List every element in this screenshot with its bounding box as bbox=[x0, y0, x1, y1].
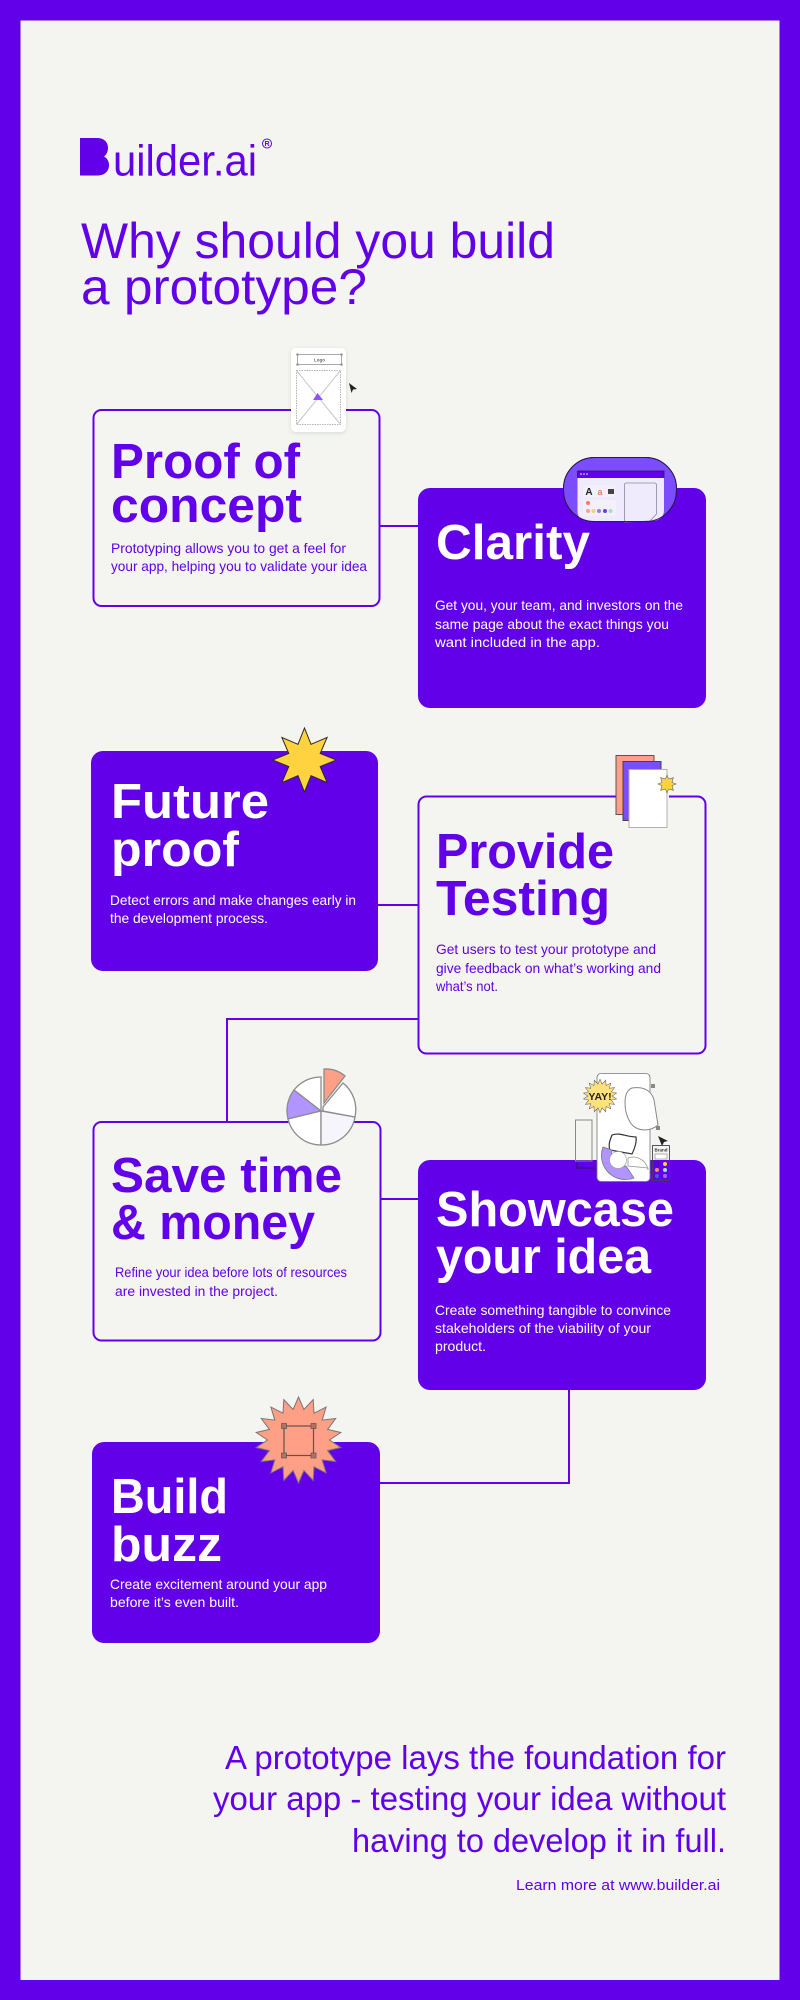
body text: provide testing: Get users to test your prototype and bbox=[436, 941, 656, 957]
heading: future proof: proof bbox=[111, 823, 240, 877]
panel: save time and money bbox=[94, 1069, 380, 1340]
panel: clarity bbox=[418, 458, 706, 708]
heading: provide testing: Testing bbox=[436, 872, 610, 926]
body text: provide testing: give feedback on what’s working and bbox=[436, 960, 661, 976]
logo: Builder.ai: R bbox=[264, 141, 270, 148]
heading: future proof bbox=[111, 775, 269, 877]
icon: app window badge bbox=[564, 458, 676, 522]
body text: clarity: Get you, your team, and investors on the bbox=[435, 597, 683, 613]
connector: showcase to build buzz bbox=[380, 1390, 569, 1483]
connector: future proof to provide testing bbox=[378, 904, 418, 906]
closing statement: A prototype lays the foundation for bbox=[225, 1739, 726, 1776]
body text: clarity: same page about the exact things you bbox=[435, 616, 669, 632]
icon: design canvas collage bbox=[576, 1074, 670, 1182]
panel: showcase your idea bbox=[418, 1074, 706, 1390]
heading: save time and money: Save time bbox=[111, 1149, 342, 1203]
panel: build buzz bbox=[92, 1397, 380, 1643]
panel: provide testing bbox=[418, 756, 706, 1054]
heading: showcase your idea: Showcase bbox=[436, 1183, 674, 1237]
heading: showcase your idea bbox=[436, 1183, 674, 1284]
body text: save time and money: are invested in the project. bbox=[115, 1283, 278, 1299]
icon: design canvas collage: Brand bbox=[654, 1148, 668, 1152]
body text: save time and money: Refine your idea before lots of resources bbox=[115, 1264, 347, 1280]
heading: proof of concept bbox=[111, 435, 302, 533]
icon: stacked pages bbox=[616, 756, 676, 828]
logo: Builder.ai: uilder.ai bbox=[113, 136, 257, 186]
icon: pie chart bbox=[287, 1069, 356, 1145]
heading: build buzz: Build bbox=[111, 1470, 228, 1524]
body text: showcase your idea bbox=[435, 1302, 671, 1354]
body text: provide testing bbox=[435, 941, 661, 994]
panel: future proof bbox=[91, 728, 378, 971]
body text: proof of concept: Prototyping allows you to get a feel for bbox=[111, 540, 346, 556]
body text: provide testing: what’s not. bbox=[435, 978, 498, 994]
closing statement: your app - testing your idea without bbox=[213, 1780, 726, 1817]
heading: proof of concept: Proof of bbox=[111, 435, 301, 489]
heading: build buzz bbox=[111, 1470, 228, 1572]
body text: proof of concept: your app, helping you to validate your idea bbox=[111, 558, 367, 574]
title: Why should you build bbox=[81, 213, 555, 269]
connector: proof of concept to clarity bbox=[380, 525, 418, 527]
body text: future proof: the development process. bbox=[110, 910, 268, 926]
connector: provide testing to save time and money bbox=[227, 1019, 418, 1122]
panel: proof of concept bbox=[94, 348, 380, 606]
heading: save time and money: & money bbox=[111, 1196, 315, 1250]
title: a prototype? bbox=[81, 259, 367, 315]
heading: showcase your idea: your idea bbox=[436, 1230, 652, 1284]
icon: wireframe bbox=[291, 348, 357, 432]
icon: wireframe: Logo bbox=[314, 358, 325, 362]
heading: build buzz: buzz bbox=[111, 1518, 222, 1572]
closing statement: having to develop it in full. bbox=[352, 1822, 726, 1859]
body text: showcase your idea: stakeholders of the viability of your bbox=[435, 1320, 651, 1336]
icon: design canvas collage: YAY! bbox=[588, 1091, 612, 1103]
heading: provide testing bbox=[436, 825, 614, 926]
closing statement bbox=[213, 1739, 726, 1859]
icon: app window badge: a bbox=[597, 487, 603, 497]
body text: future proof bbox=[110, 892, 356, 926]
heading: future proof: Future bbox=[111, 775, 269, 829]
body text: proof of concept bbox=[111, 540, 367, 574]
heading: proof of concept: concept bbox=[111, 479, 302, 533]
heading: clarity: Clarity bbox=[436, 516, 590, 570]
body text: build buzz: before it’s even built. bbox=[110, 1594, 239, 1610]
footer link text: Learn more at www.builder.ai bbox=[516, 1877, 720, 1894]
body text: clarity bbox=[434, 597, 683, 650]
icon: yellow star bbox=[272, 728, 336, 792]
body text: showcase your idea: product. bbox=[435, 1338, 486, 1354]
icon: app window badge: A bbox=[585, 487, 593, 498]
icon: salmon badge with selection square bbox=[256, 1397, 341, 1483]
body text: clarity: want included in the app. bbox=[434, 634, 600, 650]
heading: save time and money bbox=[111, 1149, 342, 1250]
connector: save time and money to showcase bbox=[381, 1198, 418, 1200]
body text: build buzz bbox=[110, 1576, 327, 1610]
body text: future proof: Detect errors and make changes early in bbox=[110, 892, 356, 908]
title bbox=[81, 213, 555, 315]
body text: save time and money bbox=[115, 1264, 347, 1299]
body text: showcase your idea: Create something tangible to convince bbox=[435, 1302, 671, 1318]
heading: provide testing: Provide bbox=[436, 825, 614, 879]
body text: build buzz: Create excitement around your app bbox=[110, 1576, 327, 1592]
